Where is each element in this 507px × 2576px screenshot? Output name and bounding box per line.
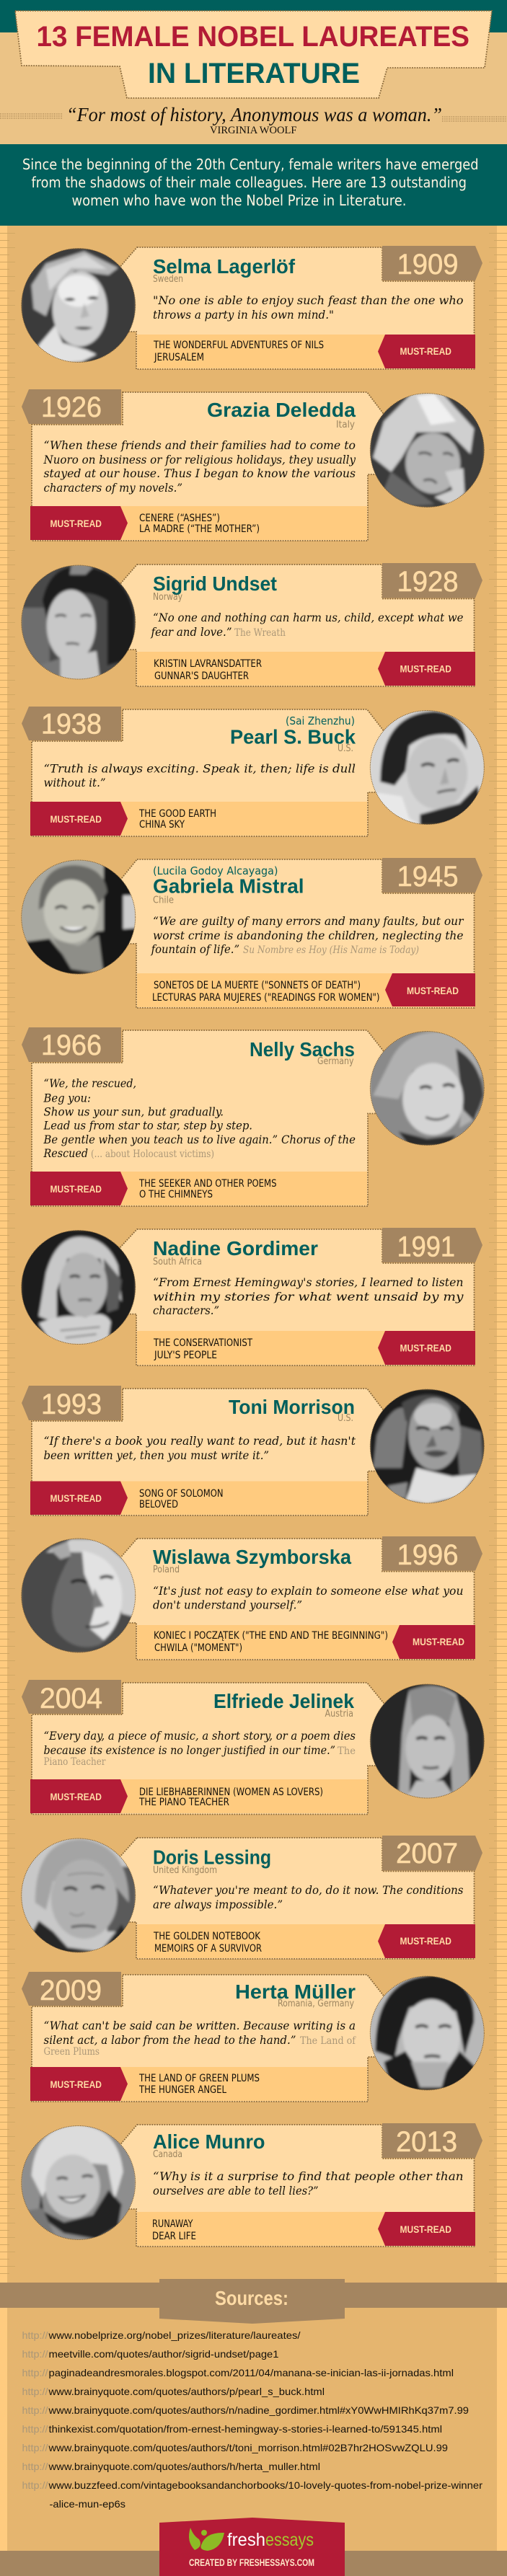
sources list: www.nobelprize.org/nobel_prizes/literature/laureates/ <box>48 2329 301 2341</box>
country: Chile <box>153 895 174 906</box>
header <box>0 0 507 144</box>
country: U.S. <box>338 1413 353 1424</box>
books <box>139 513 260 535</box>
title line 1: 13 FEMALE NOBEL LAUREATES <box>36 21 469 53</box>
panel: Doris Lessing <box>21 1836 482 1959</box>
portrait <box>369 1683 485 1799</box>
credit: CREATED BY FRESHESSAYS.COM <box>189 2557 314 2568</box>
alternate name: (Lucila Godoy Alcayaga) <box>153 864 278 877</box>
books: MEMOIRS OF A SURVIVOR <box>154 1943 262 1955</box>
year tab <box>382 2123 482 2158</box>
year tab: 2009 <box>40 1975 102 2006</box>
portrait <box>369 392 485 508</box>
footer <box>0 2518 507 2576</box>
portrait <box>369 1031 485 1146</box>
year tab: 1938 <box>41 709 102 740</box>
books: THE CONSERVATIONIST <box>153 1337 252 1349</box>
must-read <box>378 2212 475 2246</box>
name: Grazia Deledda <box>207 399 356 421</box>
quote: “What can't be said can be written. Because writing is a <box>43 2019 356 2032</box>
quote: Beg you: <box>43 1092 91 1105</box>
must-read: MUST-READ <box>400 1935 451 1947</box>
quote <box>153 293 463 322</box>
portrait <box>369 1389 485 1504</box>
country: U.S. <box>338 743 353 754</box>
panel: Sigrid Undset <box>21 563 482 686</box>
quote: don't understand yourself.” <box>153 1598 302 1612</box>
portrait <box>21 1230 136 1345</box>
year tab <box>22 1027 121 1062</box>
quote: ourselves are able to tell lies?” <box>153 2184 319 2197</box>
quote <box>43 1434 356 1462</box>
panel: Toni Morrison <box>22 1386 485 1515</box>
portrait <box>21 859 136 975</box>
name: Selma Lagerlöf <box>153 255 296 278</box>
quote: within my stories for what went unsaid by my <box>153 1290 464 1304</box>
quote: “From Ernest Hemingway's stories, I learned to listen <box>153 1275 463 1289</box>
sources list: www.brainyquote.com/quotes/authors/h/herta_muller.html <box>48 2461 320 2472</box>
portrait <box>369 709 485 825</box>
quote: “No one and nothing can harm us, child, except what we <box>153 611 463 624</box>
quote: “Whatever you're meant to do, do it now. The conditions <box>153 1883 463 1897</box>
quote <box>43 761 356 789</box>
must-read: MUST-READ <box>400 345 451 357</box>
must-read <box>30 506 128 540</box>
quote: The Wreath <box>234 627 286 639</box>
logo wordmark: fresh <box>227 2530 265 2550</box>
quote <box>153 2169 463 2197</box>
country: Romania, Germany <box>278 1999 354 2009</box>
year tab <box>22 1972 121 2006</box>
books: THE GOOD EARTH <box>138 808 216 820</box>
quote <box>151 611 464 639</box>
country: Norway <box>153 592 182 603</box>
books: GUNNAR'S DAUGHTER <box>154 670 249 682</box>
year tab <box>382 563 482 598</box>
books: KONIEC I POCZĄTEK ("THE END AND THE BEGINNING") <box>154 1630 388 1642</box>
must-read <box>30 1481 128 1515</box>
quote: “It's just not easy to explain to someone else what you <box>153 1584 463 1598</box>
books: SONETOS DE LA MUERTE ("SONNETS OF DEATH") <box>154 980 361 991</box>
quote <box>153 1883 463 1911</box>
books: THE HUNGER ANGEL <box>138 2084 226 2096</box>
must-read: MUST-READ <box>413 1636 464 1647</box>
name: Sigrid Undset <box>153 572 277 595</box>
title line 2: IN LITERATURE <box>148 58 360 89</box>
books: DEAR LIFE <box>152 2231 196 2242</box>
year tab: 1945 <box>397 861 459 893</box>
year tab: 1928 <box>397 566 459 598</box>
quote: been written yet, then you must write it.” <box>43 1448 269 1462</box>
portrait <box>369 1975 485 2091</box>
year tab <box>382 246 482 280</box>
quote <box>153 1275 464 1317</box>
sources list: http:// <box>22 2479 48 2491</box>
must-read <box>30 1779 128 1813</box>
books: JULY'S PEOPLE <box>154 1350 217 1361</box>
year tab <box>382 858 482 893</box>
panel: Alice Munro <box>21 2123 482 2247</box>
name: Nelly Sachs <box>250 1038 355 1061</box>
icon: leaf logo <box>189 2528 224 2551</box>
quote: Show us your sun, but gradually. <box>43 1105 224 1119</box>
quote <box>43 438 356 495</box>
year tab <box>22 707 121 740</box>
quote: The <box>338 1745 356 1757</box>
books: RUNAWAY <box>152 2218 193 2230</box>
country: Italy <box>336 420 355 430</box>
books <box>153 340 324 363</box>
books: DIE LIEBHABERINNEN (WOMEN AS LOVERS) <box>139 1787 323 1798</box>
sources list: www.brainyquote.com/quotes/authors/n/nadine_gordimer.html#xY0WwHMIRhKq37m7.99 <box>48 2404 469 2416</box>
name: Wislawa Szymborska <box>153 1546 351 1568</box>
portrait <box>21 564 136 680</box>
quote: Rescued <box>43 1146 88 1160</box>
sources heading <box>0 2279 507 2324</box>
sources list <box>22 2329 482 2510</box>
books: THE LAND OF GREEN PLUMS <box>138 2073 260 2084</box>
quote: Piano Teacher <box>43 1756 106 1768</box>
year tab: 1926 <box>41 391 102 423</box>
quote: Nuoro on business or for religious holidays, they usually <box>43 453 356 466</box>
name: Nadine Gordimer <box>153 1237 318 1260</box>
quote: throws a party in his own mind." <box>153 308 334 322</box>
sources list: http:// <box>22 2404 48 2416</box>
quote: stayed at our house. Thus I began to know the various <box>43 466 356 480</box>
books <box>138 808 216 831</box>
must-read: MUST-READ <box>50 1791 102 1802</box>
must-read: MUST-READ <box>400 2223 451 2235</box>
portrait <box>21 248 136 363</box>
year tab <box>22 1386 121 1420</box>
year tab <box>382 1536 482 1571</box>
year tab: 2013 <box>396 2126 457 2158</box>
quote: “Why is it a surprise to find that people other than <box>153 2169 463 2183</box>
quote: characters of my novels.” <box>43 481 182 495</box>
books: LECTURAS PARA MUJERES ("READINGS FOR WOMEN") <box>152 992 379 1004</box>
panel: Grazia Deledda <box>22 389 485 541</box>
books: CENERE (“ASHES”) <box>139 513 220 524</box>
books: THE WONDERFUL ADVENTURES OF NILS <box>153 340 324 351</box>
sources list: www.brainyquote.com/quotes/authors/t/toni_morrison.html#02B7hr2HOSvwZQLU.99 <box>48 2442 448 2453</box>
title banner <box>15 11 492 98</box>
must-read <box>378 1331 475 1365</box>
books <box>138 1787 323 1808</box>
name: Toni Morrison <box>229 1396 355 1418</box>
year tab: 1993 <box>41 1389 102 1420</box>
must-read <box>30 2067 128 2101</box>
year tab: 1996 <box>397 1539 459 1571</box>
sources list: http:// <box>22 2348 48 2360</box>
quote: fountain of life.” <box>151 942 239 956</box>
portrait <box>21 2125 136 2241</box>
quote: without it.” <box>43 776 105 789</box>
quote: Lead us from star to star, step by step. <box>43 1119 252 1132</box>
country: Poland <box>153 1564 180 1575</box>
books <box>154 1630 388 1654</box>
quote: are always impossible.” <box>153 1898 283 1911</box>
must-read <box>378 652 475 686</box>
year tab: 1909 <box>397 249 459 280</box>
must-read <box>30 802 128 836</box>
quote <box>153 1584 463 1612</box>
quote: Chorus of the <box>281 1133 356 1146</box>
books <box>154 658 262 682</box>
books: CHWILA ("MOMENT") <box>154 1642 242 1654</box>
portrait <box>21 1838 136 1953</box>
books <box>152 980 379 1004</box>
books <box>139 1488 224 1510</box>
books: LA MADRE (“THE MOTHER”) <box>139 523 260 535</box>
quote: “If there's a book you really want to read, but it hasn't <box>43 1434 356 1448</box>
sources list: paginadeandresmorales.blogspot.com/2011/04/manana-se-inician-las-ii-jornadas.html <box>49 2367 454 2378</box>
panel: Herta Müller <box>22 1972 485 2102</box>
sources list: thinkexist.com/quotation/from-ernest-hemingway-s-stories-i-learned-to/591345.html <box>49 2423 442 2435</box>
must-read <box>392 1625 475 1659</box>
sources heading: Sources: <box>215 2287 288 2309</box>
must-read: MUST-READ <box>50 813 102 825</box>
country: Sweden <box>153 274 183 285</box>
quote <box>43 1729 356 1768</box>
quote: Green Plums <box>43 2046 100 2058</box>
sources list: www.buzzfeed.com/vintagebooksandanchorbooks/10-lovely-quotes-from-nobel-prize-winner <box>48 2479 482 2491</box>
books: THE PIANO TEACHER <box>138 1797 229 1808</box>
epigraph quote: “For most of history, Anonymous was a woman.” <box>66 104 442 125</box>
intro panel <box>0 144 507 226</box>
must-read: MUST-READ <box>400 1342 451 1354</box>
quote: “When these friends and their families had to come to <box>43 438 356 452</box>
books: KRISTIN LAVRANSDATTER <box>154 658 262 670</box>
sources list: http:// <box>22 2423 48 2435</box>
must-read: MUST-READ <box>50 2079 102 2090</box>
must-read: MUST-READ <box>50 1183 102 1195</box>
quote: Be gentle when you teach us to live again.” <box>43 1133 278 1146</box>
books <box>152 2218 196 2242</box>
must-read: MUST-READ <box>400 663 451 675</box>
epigraph quote: VIRGINIA WOOLF <box>210 125 297 136</box>
quote <box>151 914 464 956</box>
must-read: MUST-READ <box>50 518 102 529</box>
quote: “We, the rescued, <box>43 1076 136 1090</box>
must-read <box>30 1172 128 1205</box>
portrait <box>21 1538 136 1653</box>
must-read <box>385 973 475 1006</box>
year tab: 2007 <box>396 1838 458 1869</box>
sources list: http:// <box>22 2442 48 2453</box>
year tab <box>382 1836 482 1870</box>
name: Doris Lessing <box>153 1846 271 1869</box>
quote: “Every day, a piece of music, a short story, or a poem dies <box>43 1729 356 1743</box>
logo wordmark: essays <box>265 2530 314 2550</box>
must-read <box>378 1924 475 1958</box>
year tab <box>382 1228 482 1263</box>
books: BELOVED <box>139 1499 178 1510</box>
panel: Pearl S. Buck <box>22 707 485 836</box>
sources list: http:// <box>22 2461 48 2472</box>
intro panel: women who have won the Nobel Prize in Literature. <box>72 192 407 209</box>
panel: Gabriela Mistral <box>21 858 482 1008</box>
books <box>153 1337 252 1361</box>
quote <box>43 2019 356 2058</box>
quote: silent act, a labor from the head to the hand.” <box>43 2033 296 2047</box>
name: Pearl S. Buck <box>230 725 356 748</box>
quote: characters.” <box>153 1304 219 1317</box>
panel: Wislawa Szymborska <box>21 1536 482 1660</box>
panel: Nelly Sachs <box>22 1027 485 1206</box>
sources list: http:// <box>22 2386 48 2397</box>
country: United Kingdom <box>153 1865 217 1876</box>
country: Austria <box>325 1709 353 1719</box>
panel: Selma Lagerlöf <box>21 246 482 369</box>
books <box>138 1178 277 1200</box>
quote: The Land of <box>300 2035 356 2047</box>
year tab: 1991 <box>397 1231 455 1263</box>
country: Germany <box>317 1056 354 1067</box>
quote <box>43 1076 356 1160</box>
sources list: meetville.com/quotes/author/sigrid-undset/page1 <box>49 2348 279 2360</box>
name: Herta Müller <box>235 1980 356 2003</box>
alternate name: (Sai Zhenzhu) <box>286 714 355 727</box>
quote: because its existence is no longer justified in our time.” <box>43 1743 335 1757</box>
country: Canada <box>153 2149 182 2160</box>
year tab <box>22 1680 121 1714</box>
sources list: www.brainyquote.com/quotes/authors/p/pearl_s_buck.html <box>48 2386 325 2397</box>
name: Gabriela Mistral <box>153 875 304 898</box>
books: THE GOLDEN NOTEBOOK <box>153 1931 261 1942</box>
must-read: MUST-READ <box>50 1492 102 1504</box>
books: O THE CHIMNEYS <box>139 1189 213 1200</box>
sources list: http:// <box>22 2367 48 2378</box>
books: SONG OF SOLOMON <box>139 1488 224 1500</box>
quote: worst crime is abandoning the children, neglecting the <box>153 929 463 942</box>
year tab: 1966 <box>41 1030 102 1061</box>
sources list: http:// <box>22 2329 48 2341</box>
must-read: MUST-READ <box>407 985 459 996</box>
panel: Elfriede Jelinek <box>22 1680 485 1814</box>
quote: (... about Holocaust victims) <box>91 1148 214 1160</box>
quote: “Truth is always exciting. Speak it, then; life is dull <box>43 761 356 776</box>
panel: Nadine Gordimer <box>21 1228 482 1366</box>
sources list: -alice-mun-ep6s <box>49 2498 125 2510</box>
logo wordmark <box>227 2530 314 2550</box>
books: CHINA SKY <box>139 819 185 831</box>
books <box>138 2073 260 2096</box>
quote: fear and love.” <box>151 625 232 639</box>
country: South Africa <box>153 1257 202 1267</box>
books: THE SEEKER AND OTHER POEMS <box>138 1178 277 1190</box>
must-read <box>378 335 475 368</box>
year tab <box>22 389 121 424</box>
quote: "No one is able to enjoy such feast than the one who <box>153 293 463 307</box>
name: Alice Munro <box>153 2130 265 2153</box>
quote: Su Nombre es Hoy (His Name is Today) <box>243 944 419 956</box>
books <box>153 1931 262 1955</box>
books: JERUSALEM <box>154 352 204 363</box>
quote: “We are guilty of many errors and many faults, but our <box>153 914 464 928</box>
name: Elfriede Jelinek <box>213 1690 354 1712</box>
epigraph quote <box>0 104 507 136</box>
year tab: 2004 <box>40 1683 102 1714</box>
